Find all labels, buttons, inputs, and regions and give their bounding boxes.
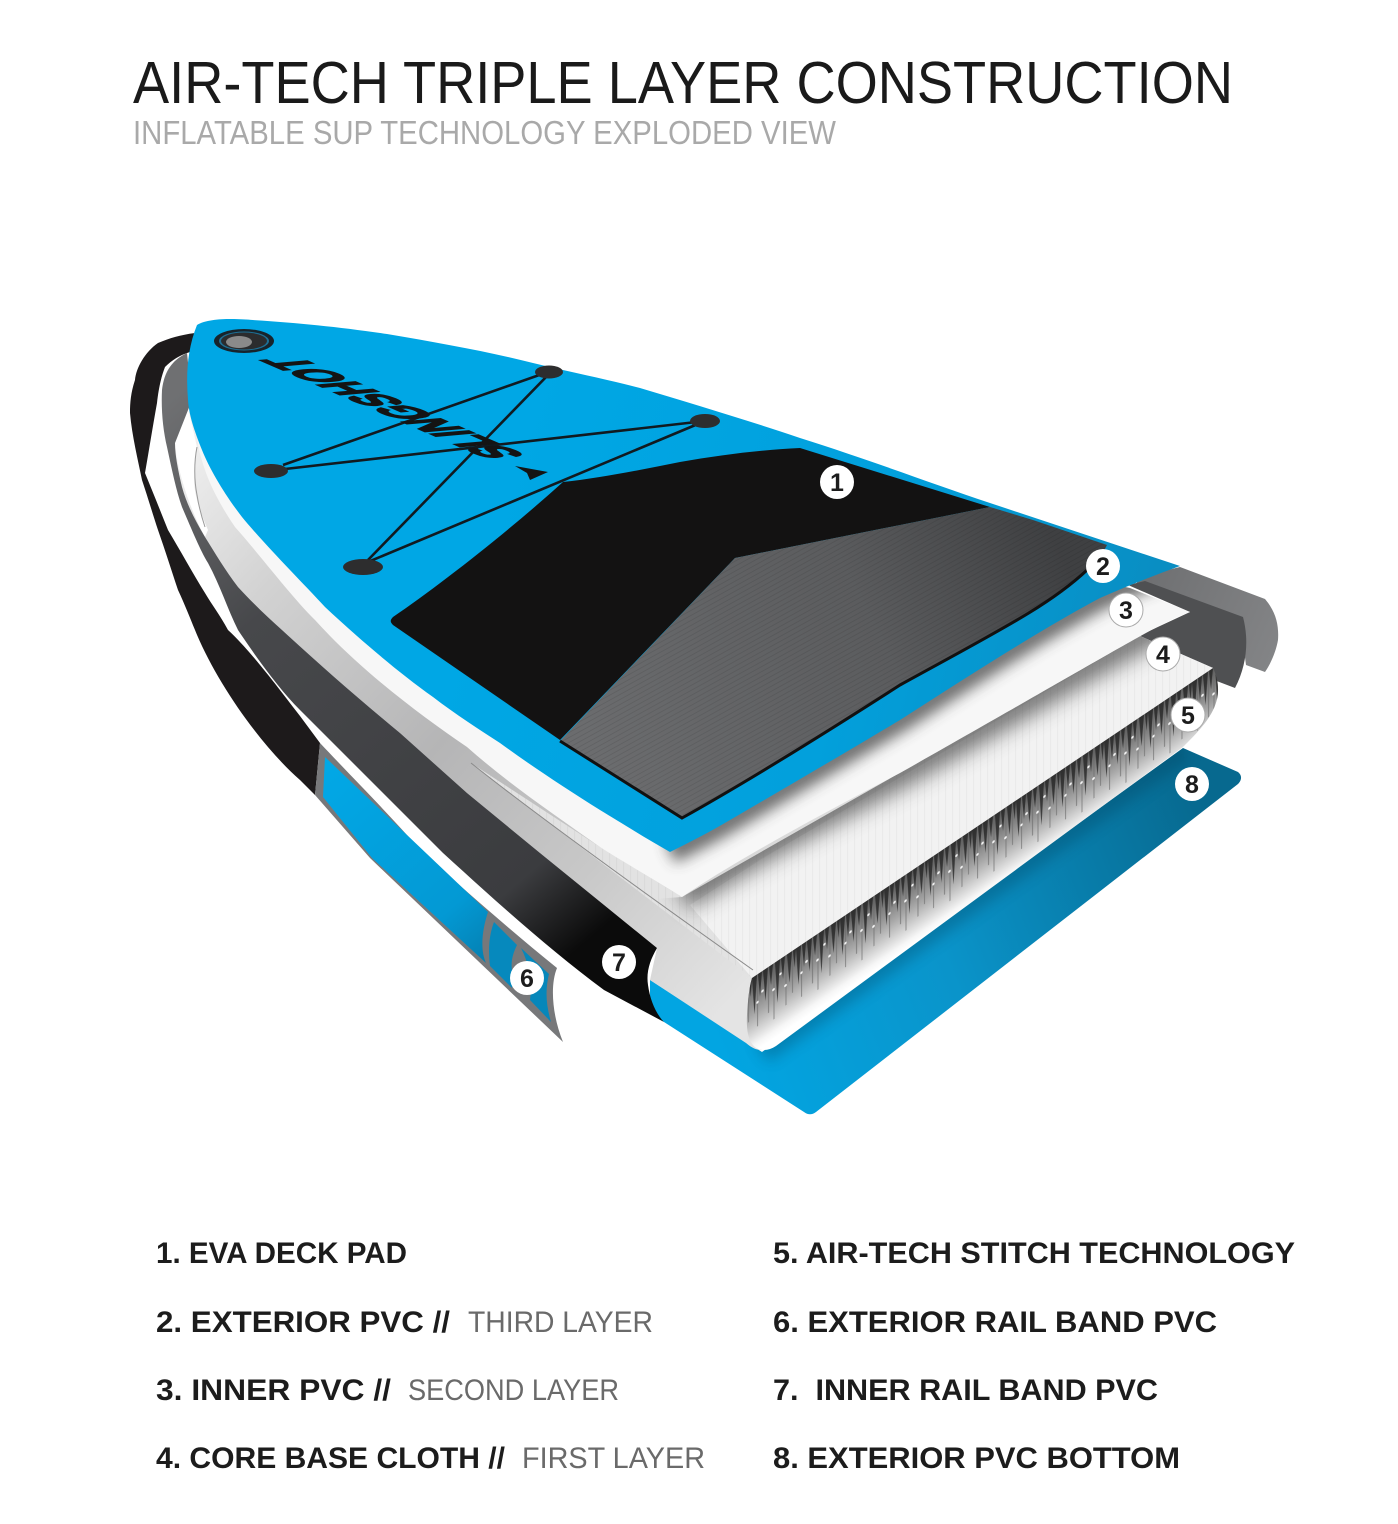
layer 3: inner PVC — [197, 430, 1190, 897]
badge 8 — [1175, 767, 1209, 801]
SLINGSHOT logo — [248, 356, 548, 480]
layer 7: inner rail band — [162, 353, 664, 1022]
core shadow under inner PVC — [682, 612, 1190, 897]
deck pad: black section — [391, 448, 990, 740]
badge 3: 3 — [1119, 597, 1133, 625]
badge 8: 8 — [1185, 771, 1199, 799]
exploded board diagram — [130, 319, 1278, 1114]
legend item 6: 6. EXTERIOR RAIL BAND PVC — [773, 1306, 1217, 1339]
number badges — [510, 465, 1209, 995]
layer 3 end: dark inner cut — [1128, 581, 1246, 688]
badge 6: 6 — [520, 965, 534, 993]
legend item 1: 1. EVA DECK PAD — [156, 1237, 407, 1270]
legend item 3: 3. INNER PVC // — [156, 1374, 392, 1407]
layer 6: gray band with blue graphic — [315, 743, 563, 1042]
badge 7 — [602, 945, 636, 979]
legend item 8: 8. EXTERIOR PVC BOTTOM — [773, 1442, 1180, 1475]
valve — [214, 329, 274, 353]
badge 1: 1 — [830, 469, 844, 497]
layer 6: outer rail band black — [130, 333, 320, 795]
legend item 5: 5. AIR-TECH STITCH TECHNOLOGY — [773, 1237, 1295, 1270]
bungee anchor points — [254, 366, 720, 575]
badge 3 — [1109, 593, 1143, 627]
badge 5 — [1171, 698, 1205, 732]
deck pad: gray section — [560, 507, 1107, 818]
legend item 2: THIRD LAYER — [468, 1306, 653, 1339]
badge 7: 7 — [612, 949, 626, 977]
SLINGSHOT logo: SLINGSHOT — [248, 356, 539, 460]
legend item 4 — [156, 1442, 705, 1475]
badge 4 — [1146, 637, 1180, 671]
layer 5: air-tech stitch drop stitch — [747, 668, 1218, 1050]
badge 6 — [510, 961, 544, 995]
badge 4: 4 — [1156, 641, 1170, 669]
layer 2: exterior PVC deck — [187, 319, 1180, 852]
layer 4: core base cloth — [175, 408, 1213, 1050]
layer 2 end: gray exterior foam cut — [1135, 567, 1278, 672]
bungee deck lines — [283, 373, 705, 562]
legend item 3: SECOND LAYER — [408, 1374, 619, 1407]
legend item 3 — [156, 1374, 619, 1407]
badge 2: 2 — [1096, 553, 1110, 581]
legend — [156, 1237, 1295, 1475]
legend item 7: 7. INNER RAIL BAND PVC — [773, 1374, 1158, 1407]
layer 8: exterior PVC bottom — [650, 748, 1241, 1114]
badge 2 — [1086, 549, 1120, 583]
legend item 4: 4. CORE BASE CLOTH // — [156, 1442, 506, 1475]
badge 5: 5 — [1181, 702, 1195, 730]
legend item 2: 2. EXTERIOR PVC // — [156, 1306, 451, 1339]
badge 1 — [820, 465, 854, 499]
title: AIR-TECH TRIPLE LAYER CONSTRUCTION — [133, 50, 1233, 116]
legend item 2 — [156, 1306, 653, 1339]
subtitle: INFLATABLE SUP TECHNOLOGY EXPLODED VIEW — [133, 114, 837, 151]
legend item 4: FIRST LAYER — [522, 1442, 705, 1475]
